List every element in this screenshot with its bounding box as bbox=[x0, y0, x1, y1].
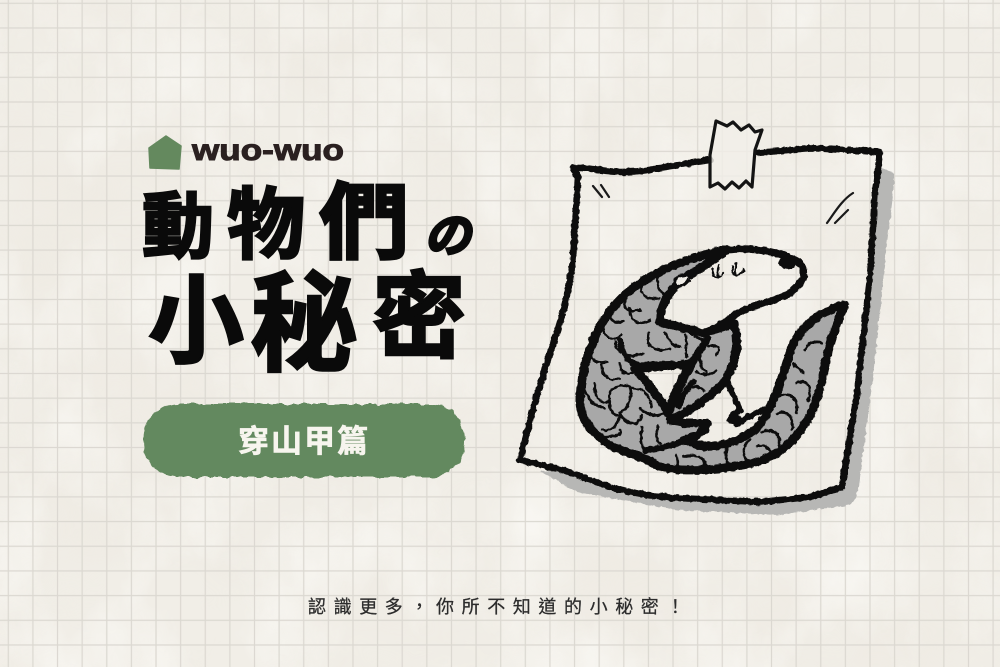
title: 小 bbox=[148, 269, 244, 376]
eyes bbox=[712, 264, 744, 277]
title: 秘 bbox=[250, 264, 358, 385]
logo bbox=[149, 134, 344, 169]
title bbox=[142, 176, 474, 385]
note shadow bbox=[540, 168, 894, 515]
tape bbox=[710, 121, 762, 189]
tagline: 認識更多，你所不知道的小秘密！ bbox=[308, 597, 692, 617]
icon: green house bbox=[149, 136, 181, 169]
title: 動 bbox=[142, 188, 214, 268]
brand name: wuo-wuo bbox=[191, 134, 344, 167]
note outline bbox=[520, 148, 880, 502]
subtitle pill bbox=[143, 404, 465, 477]
illustration: taped note with pangolin bbox=[520, 121, 894, 515]
pill label: 穿山甲篇 bbox=[238, 424, 370, 459]
title: 物 bbox=[227, 181, 305, 269]
title: 們 bbox=[319, 176, 409, 270]
title: の bbox=[424, 209, 474, 262]
highlight marks bbox=[593, 185, 853, 223]
pangolin head bbox=[713, 249, 804, 330]
pill background bbox=[143, 404, 465, 477]
limbs bbox=[620, 338, 765, 451]
foot bbox=[730, 413, 742, 422]
scale lines bbox=[583, 273, 822, 470]
pangolin bbox=[580, 249, 845, 470]
title: 密 bbox=[372, 265, 466, 370]
nose bbox=[779, 256, 796, 269]
pangolin body with scales bbox=[580, 250, 845, 470]
ear bbox=[675, 275, 689, 286]
